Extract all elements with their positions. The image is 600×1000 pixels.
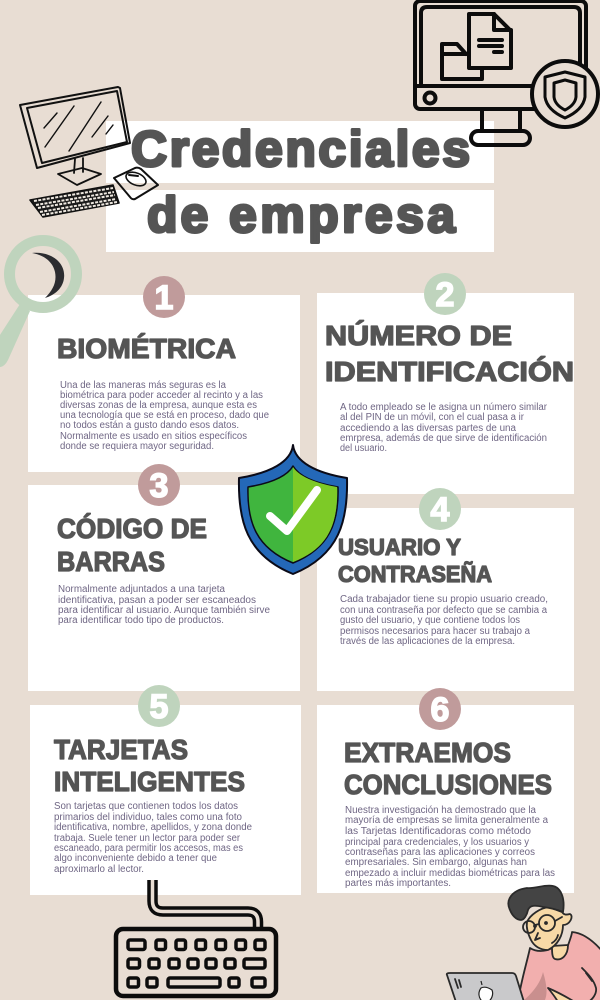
heading 3: BARRAS xyxy=(57,546,165,577)
number badge 1: 1 xyxy=(155,279,173,317)
text block 6: principal para credenciales, y los usuarios y xyxy=(345,837,529,848)
text block 1: Normalmente es usado en sitios específicos xyxy=(60,431,247,442)
text block 6 xyxy=(345,805,555,889)
heading 2: NÚMERO DE xyxy=(325,320,512,351)
heading 5 xyxy=(54,734,245,797)
number badge 5 xyxy=(138,685,180,727)
icon: laptop apple logo xyxy=(479,981,493,1000)
number badge 6 xyxy=(419,688,461,730)
text block 2: A todo empleado se le asigna un número similar xyxy=(340,402,548,413)
text block 6: empezado a incluir medidas biométricas para las xyxy=(345,868,555,879)
text block 6: partes más importantes. xyxy=(345,878,451,889)
text block 4: permisos necesarios para hacer su trabajo a xyxy=(340,626,530,637)
text block 3: Normalmente adjuntados a una tarjeta xyxy=(58,584,225,595)
icon: monitor with folder, document and shield xyxy=(415,1,598,145)
text block 6: mayoría de empresas se limita generalmente a xyxy=(345,815,548,826)
panel 6: extraemos conclusiones xyxy=(317,705,574,893)
text block 2: accediendo a las diversas partes de una xyxy=(340,423,516,434)
number badge 3: 3 xyxy=(150,467,168,505)
text block 1: biométrica para poder acceder al recinto y a las xyxy=(60,390,263,401)
text block 6: Nuestra investigación ha demostrado que la xyxy=(345,805,536,816)
heading 6 xyxy=(344,737,552,800)
heading 5: INTELIGENTES xyxy=(54,766,245,797)
number badge 5: 5 xyxy=(150,688,168,726)
text block 4: Cada trabajador tiene su propio usuario creado, xyxy=(340,594,548,605)
text block 3 xyxy=(58,584,270,626)
icon: sketched desktop computer xyxy=(20,87,158,217)
heading 6: CONCLUSIONES xyxy=(344,769,552,800)
text block 5: Son tarjetas que contienen todos los datos xyxy=(54,801,238,812)
text block 6: las Tarjetas Identificadoras como método xyxy=(345,826,531,837)
text block 1: donde se requiera mayor seguridad. xyxy=(60,441,214,452)
text block 5: escaneado, para permitir los accesos, mas es xyxy=(54,843,243,854)
number badge 6: 6 xyxy=(431,691,449,729)
icon: keyboard with cable xyxy=(116,880,276,996)
text block 2: emrpresa, además de que sirve de identificación xyxy=(340,433,547,444)
title: Credenciales xyxy=(131,121,470,177)
heading 1: BIOMÉTRICA xyxy=(57,333,236,364)
text block 5: identificativa, nombre, apellidos, y zona donde xyxy=(54,822,252,833)
panel 3: código de barras xyxy=(28,485,300,691)
illustration: person with glasses using a laptop xyxy=(447,886,600,1000)
text block 4: con una contraseña por defecto que se cambia a xyxy=(340,605,547,616)
heading 2: IDENTIFICACIÓN xyxy=(325,356,574,387)
number badge 2: 2 xyxy=(436,276,454,314)
text block 2: del usuario. xyxy=(340,443,387,454)
icon: green shield with check mark xyxy=(239,445,347,574)
number badge 3 xyxy=(138,464,180,506)
text block 4: través de las aplicaciones de la empresa. xyxy=(340,636,515,647)
text block 5: algo inconveniente debido a tener que xyxy=(54,853,217,864)
panel 4: usuario y contraseña xyxy=(317,508,574,691)
heading 3: CÓDIGO DE xyxy=(57,513,207,544)
title: empresa xyxy=(229,187,458,243)
text block 5 xyxy=(54,801,252,875)
number badge 4: 4 xyxy=(431,491,450,529)
panel 1: biométrica xyxy=(28,295,300,472)
icon: magnifying glass xyxy=(0,240,76,367)
heading 4 xyxy=(338,534,492,587)
text block 2: al del PIN de un móvil, con el cual pasa a ir xyxy=(340,412,525,423)
text block 4: gusto del usuario, y que contiene todos los xyxy=(340,615,520,626)
text block 1 xyxy=(60,380,269,452)
text block 1: una tecnología que se está en proceso, dado que xyxy=(60,410,269,421)
panel 5: tarjetas inteligentes xyxy=(30,705,301,895)
title background: line 2 xyxy=(106,190,494,252)
text block 6: empresariales. Sin embargo, algunas han xyxy=(345,857,527,868)
text block 1: diversas zonas de la empresa, aunque esta es xyxy=(60,400,257,411)
text block 1: no todos están a gusto dando esos datos. xyxy=(60,420,239,431)
title: de xyxy=(147,187,211,243)
number badge 2 xyxy=(424,273,466,315)
text block 5: primarios del individuo, tales como una foto xyxy=(54,812,242,823)
text block 6: contraseñas para las aplicaciones y correos xyxy=(345,847,535,858)
title xyxy=(131,121,470,243)
number badge 4 xyxy=(419,488,461,530)
panel 2: número de identificación xyxy=(317,293,574,494)
heading 6: EXTRAEMOS xyxy=(344,737,511,768)
text block 5: aproximarlo al lector. xyxy=(54,864,144,875)
text block 5: trabaja. Suele tener un lector para poder ser xyxy=(54,833,241,844)
heading 4: CONTRASEÑA xyxy=(338,560,492,587)
text block 1: Una de las maneras más seguras es la xyxy=(60,380,226,391)
heading 5: TARJETAS xyxy=(54,734,188,765)
number badge 1 xyxy=(143,276,185,318)
heading 2 xyxy=(325,320,574,387)
text block 2 xyxy=(340,402,548,454)
text block 3: para identificar al usuario. Aunque también sirve xyxy=(58,605,270,616)
text block 3: para identificar todo tipo de productos. xyxy=(58,615,224,626)
title background: line 1 xyxy=(106,121,494,183)
heading 4: USUARIO Y xyxy=(338,534,461,560)
text block 4 xyxy=(340,594,548,647)
heading 3 xyxy=(57,513,207,577)
text block 3: identificativa, pasan a poder ser escaneados xyxy=(58,595,256,606)
